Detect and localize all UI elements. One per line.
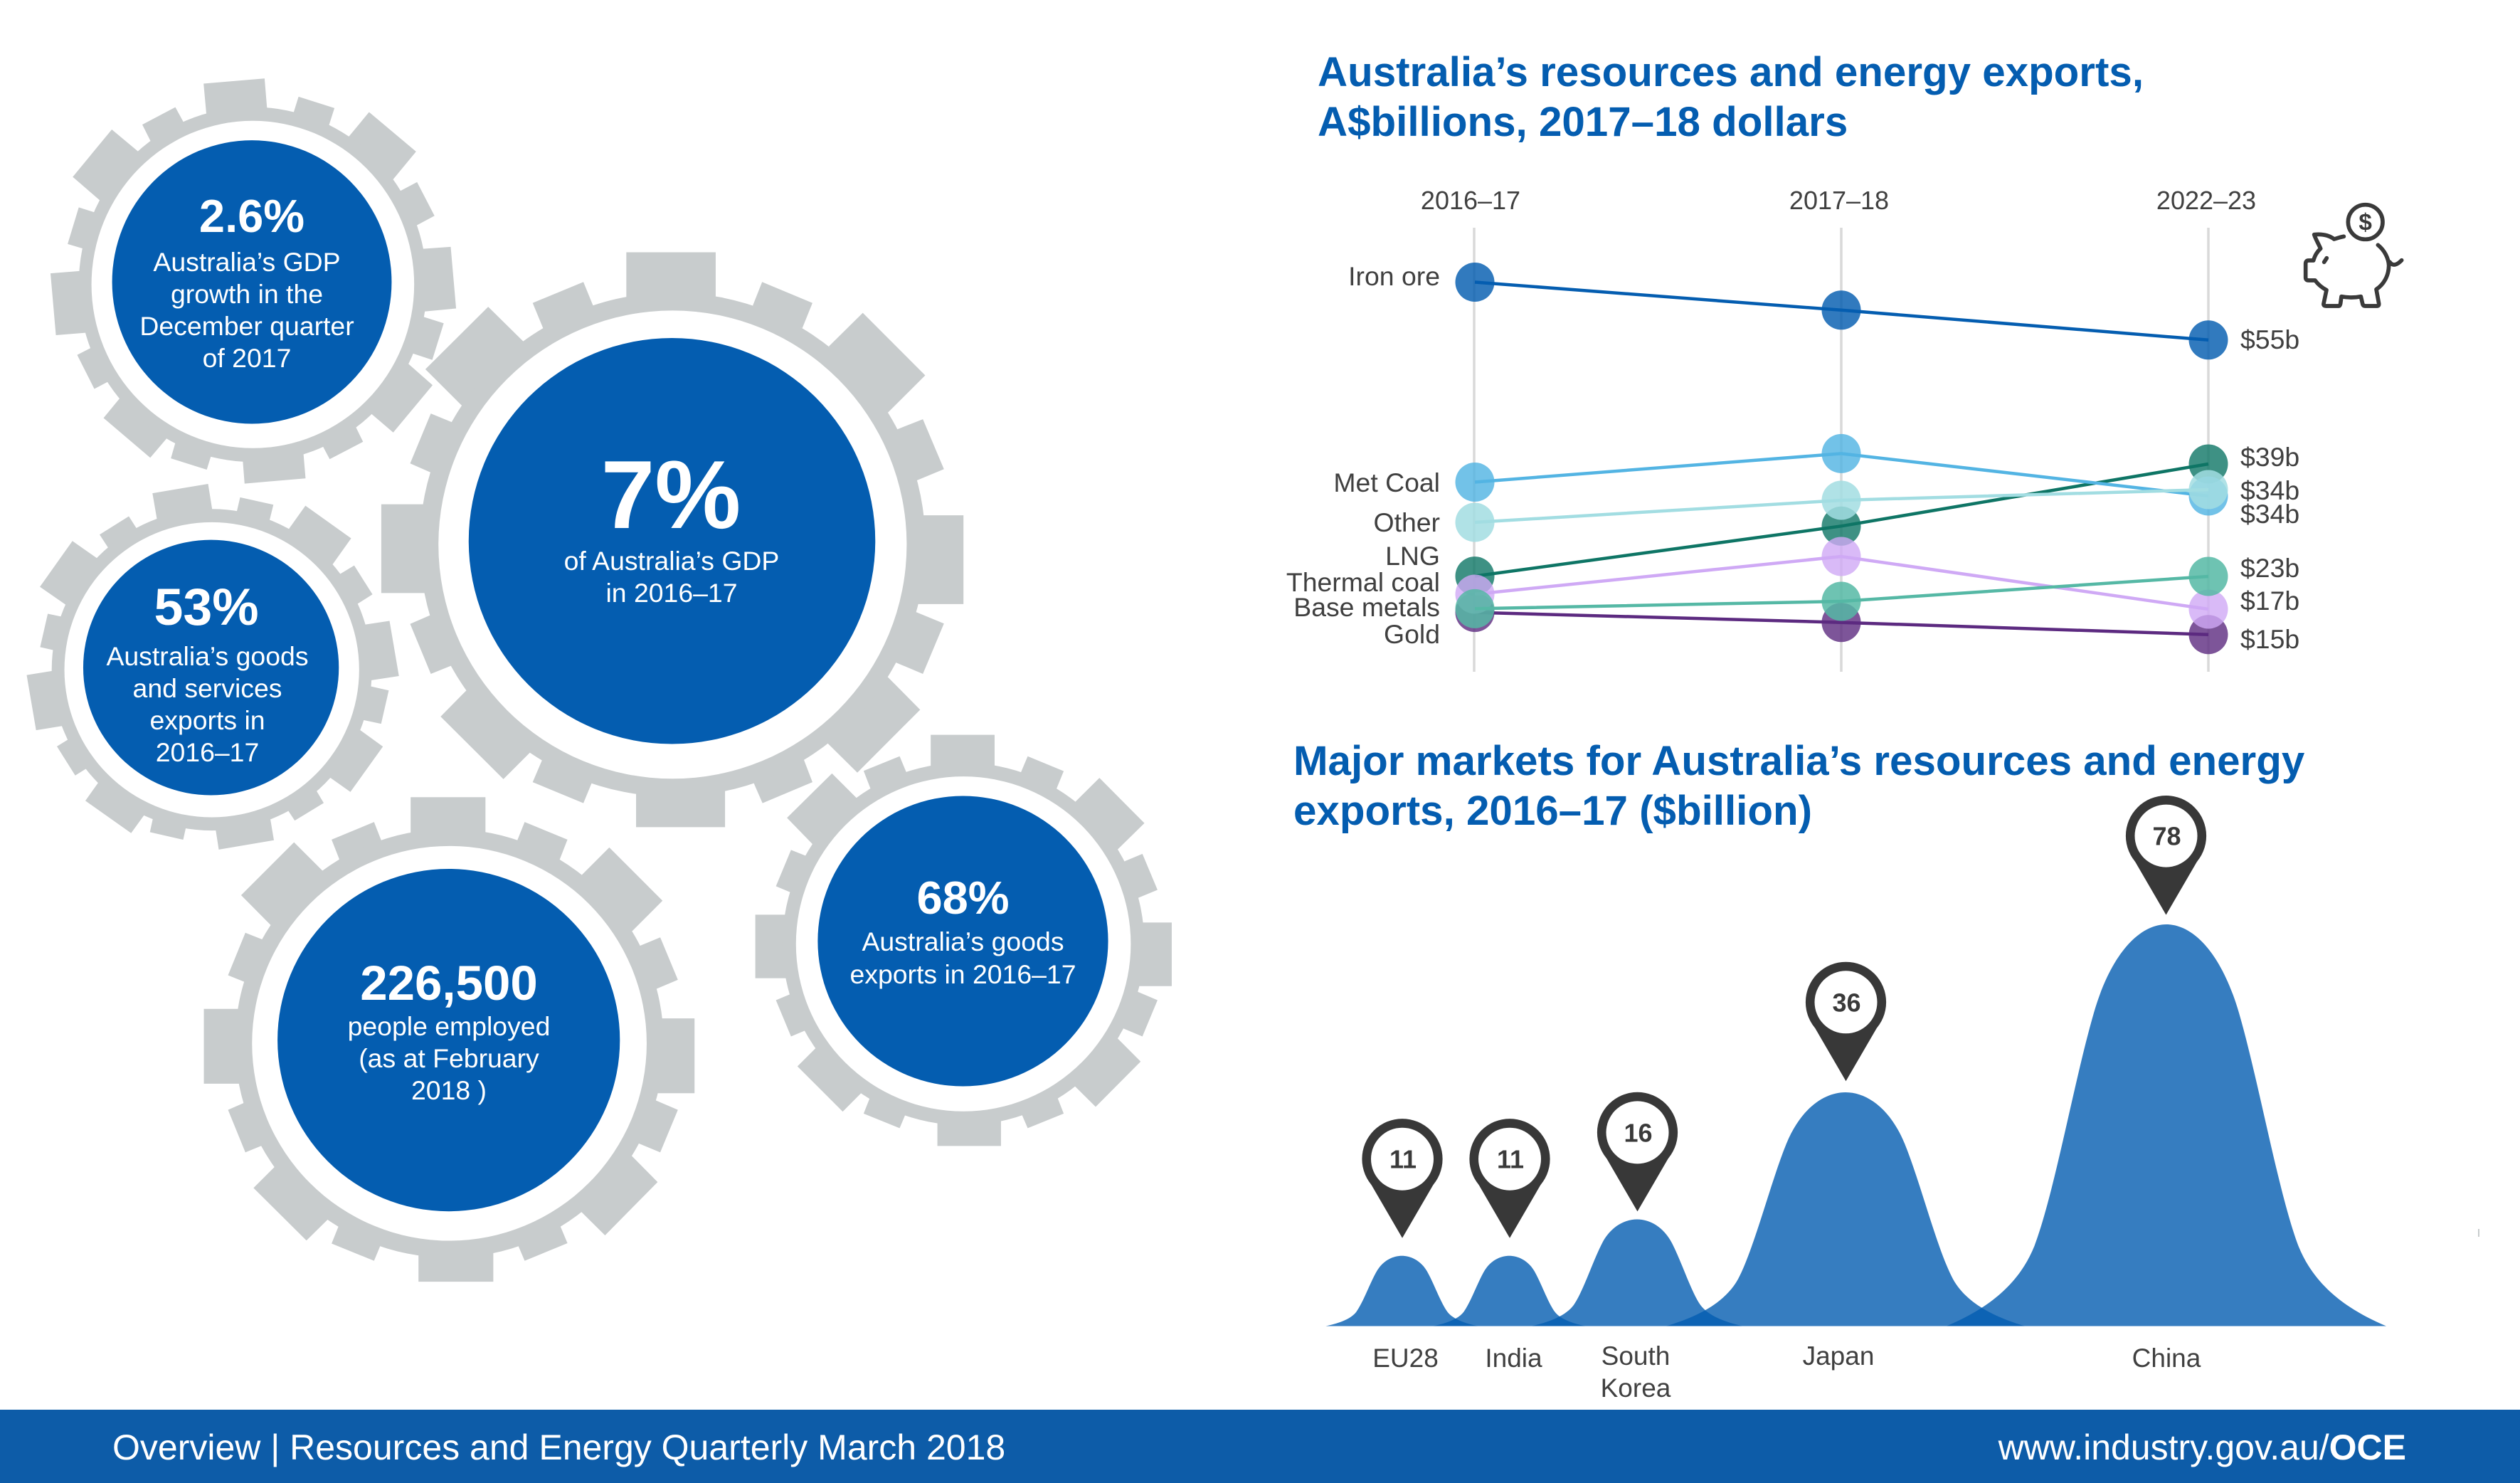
icon: piggy bank with coin (2306, 205, 2402, 306)
series labels: Iron ore (1348, 261, 1440, 291)
panel: gear 2.6% GDP growth: of 2017 (203, 343, 291, 373)
chart: exports slope chart (1286, 186, 2299, 672)
value labels: $17b (2240, 586, 2299, 616)
value labels: $55b (2240, 324, 2299, 354)
series: met coal (1456, 434, 2228, 515)
panel: gear 53% exports: Australia’s goods (106, 641, 309, 671)
panel: gear 7% of GDP: 7% (601, 440, 741, 549)
panel: gear 2.6% GDP growth: growth in the (171, 279, 323, 309)
panel: gear 53% exports: 53% (154, 577, 259, 636)
footer: publication title: Overview | Resources and Energy Quarterly March 2018 (112, 1427, 1005, 1467)
market labels: South (1602, 1341, 1670, 1371)
panel: gear 53% exports: exports in (149, 705, 265, 735)
heading: exports chart title: Australia’s resources and energy exports, (1318, 49, 2144, 95)
footer bar (0, 1410, 2520, 1483)
series: base metals (1456, 556, 2228, 628)
series: LNG (1456, 444, 2228, 596)
panel: gear 7% of GDP: of Australia’s GDP (564, 546, 779, 576)
panel: gear 68% goods exports: exports in 2016–17 (849, 959, 1076, 989)
market labels: China (2132, 1344, 2201, 1373)
pin: China 78 (2126, 796, 2206, 915)
series: iron ore (1456, 263, 2228, 359)
panel: gear 68% goods exports: Australia’s goods (862, 927, 1064, 956)
panel: gear 2.6% GDP growth: Australia’s GDP (153, 247, 341, 277)
heading: major markets title: Major markets for Australia’s resources and energy (1293, 738, 2304, 784)
panel: gear 2.6% GDP growth: 2.6% (199, 190, 305, 242)
panel: gear 53% exports: 2016–17 (156, 737, 259, 767)
series labels: Met Coal (1333, 468, 1440, 497)
chart: major markets bell curves (1325, 924, 2386, 1326)
pin: EU28 11: 11 (1389, 1145, 1417, 1174)
series labels: Base metals (1293, 592, 1440, 622)
value labels: $34b (2240, 475, 2299, 505)
panel: gear 226,500 employed: (as at February (359, 1043, 539, 1073)
panel: gear 226,500 employed (204, 797, 694, 1282)
small tick mark (2478, 1229, 2479, 1237)
chart column headings: 2022–23 (2156, 186, 2256, 215)
panel: gear 2.6% GDP growth: December quarter (139, 311, 354, 341)
series: other (1456, 470, 2228, 542)
pin: South Korea 16 (1597, 1092, 1678, 1211)
panel: gear 226,500 employed: 2018 ) (411, 1075, 487, 1105)
series labels: Thermal coal (1286, 567, 1440, 597)
pin: India 11: 11 (1497, 1145, 1524, 1174)
panel: gear 7% of GDP: in 2016–17 (605, 578, 738, 608)
series: thermal coal (1456, 537, 2228, 629)
panel: gear 68% goods exports (756, 735, 1172, 1146)
market labels: EU28 (1372, 1344, 1439, 1373)
value labels (2240, 324, 2299, 654)
pin: EU28 11 (1362, 1119, 1443, 1238)
series labels: LNG (1385, 541, 1440, 571)
market labels: Korea (1601, 1373, 1671, 1403)
panel: gear 2.6% GDP growth (51, 78, 456, 484)
pin: Japan 36: 36 (1832, 988, 1861, 1017)
market labels (1372, 1341, 2201, 1403)
series: gold (1456, 593, 2228, 654)
value labels: $34b (2240, 499, 2299, 529)
series labels: Gold (1384, 619, 1440, 649)
panel: gear 226,500 employed: 226,500 (360, 956, 538, 1010)
pin: India 11 (1469, 1119, 1550, 1238)
value labels: $23b (2240, 553, 2299, 583)
pin: Japan 36 (1806, 962, 1886, 1081)
icon: piggy bank with coin: $ (2358, 209, 2372, 236)
panel: gear 7% of GDP (381, 252, 963, 827)
chart column headings: 2016–17 (1421, 186, 1520, 215)
value labels: $15b (2240, 624, 2299, 654)
series labels: Other (1373, 507, 1440, 537)
panel: gear 226,500 employed: people employed (348, 1011, 550, 1041)
heading: major markets title: exports, 2016–17 ($billion) (1293, 788, 1812, 834)
heading: exports chart title: A$billions, 2017–18 dollars (1318, 99, 1848, 145)
value labels: $39b (2240, 442, 2299, 472)
panel: gear 53% exports: and services (133, 673, 282, 703)
footer: website: www.industry.gov.au/OCE (1998, 1427, 2406, 1467)
chart column headings (1421, 186, 2256, 215)
panel: gear 53% exports (26, 484, 399, 850)
panel: gear 68% goods exports: 68% (916, 872, 1010, 924)
market labels: India (1485, 1344, 1542, 1373)
series labels (1286, 261, 1440, 649)
chart column headings: 2017–18 (1789, 186, 1889, 215)
pin: South Korea 16: 16 (1624, 1118, 1653, 1147)
market labels: Japan (1803, 1341, 1874, 1371)
pin: China 78: 78 (2152, 822, 2181, 851)
